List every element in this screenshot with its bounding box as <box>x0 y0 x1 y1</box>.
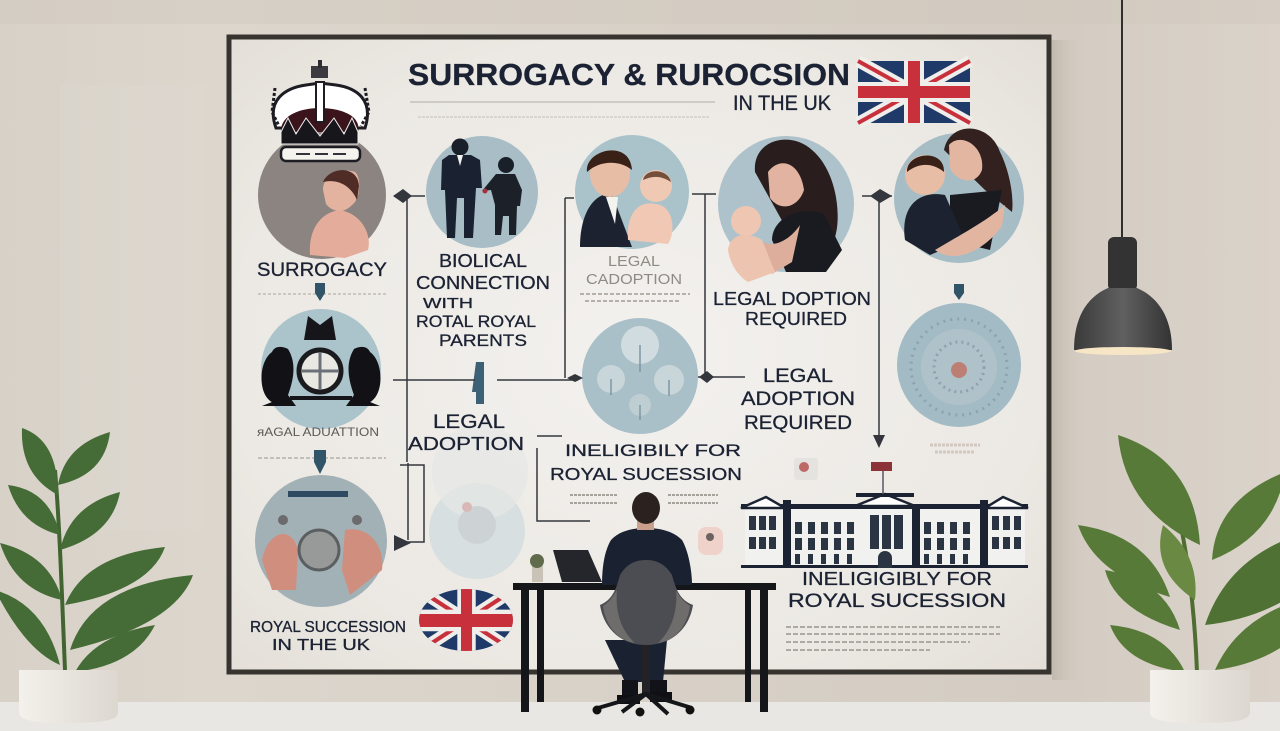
label: biological connection: PARENTS <box>439 331 527 350</box>
icon: location pin right <box>954 284 964 300</box>
icon: royal coat of arms <box>261 309 381 429</box>
label: biological connection <box>416 251 550 350</box>
label: legal adoption: LEGAL <box>433 412 505 433</box>
lamp <box>1074 0 1172 355</box>
label: ineligibly for royal succession right <box>786 569 1006 650</box>
label: legal adoption required: LEGAL <box>763 366 833 387</box>
label: legal adoption <box>408 362 524 454</box>
title: SURROGACY & RUROCSION <box>408 57 850 92</box>
label: biological connection: BIOLICAL <box>439 251 527 271</box>
label: ineligibly for royal succession right: INELIGIGIBLY FOR <box>802 569 992 589</box>
panel: emblem right <box>897 303 1021 427</box>
label: biological connection: ROTAL ROYAL <box>416 312 536 331</box>
panel: woman with child <box>894 128 1024 263</box>
framed board <box>229 37 1049 672</box>
label: legal dopotion required: LEGAL DOPTION <box>713 289 871 309</box>
plant right <box>1078 435 1280 723</box>
icon: UK flag top <box>858 61 970 123</box>
small decorative notes <box>570 445 980 555</box>
label: biological connection: WITH <box>423 295 473 312</box>
label: royal succession in the uk <box>250 619 406 654</box>
label: royal succession in the uk: IN THE UK <box>272 637 371 654</box>
label: legal dopotion required <box>713 289 871 329</box>
icon: location pin left top <box>315 283 325 301</box>
palace <box>741 462 1028 568</box>
label: ineligibly for royal succession center: INELIGIBILY FOR <box>565 441 741 460</box>
title: IN THE UK <box>733 92 831 115</box>
label: legal adoption faded left <box>257 425 386 458</box>
panel: seal <box>255 475 387 607</box>
label: legal adoption required <box>741 366 855 434</box>
label: ineligibly for royal succession center: ROYAL SUCESSION <box>550 464 742 484</box>
label: legal adoption faded left: ᴙAGAL ADUATTION <box>257 425 379 439</box>
icon: UK flag circle <box>419 589 513 651</box>
label: legal adoption required: ADOPTION <box>741 389 855 410</box>
panel: boy with baby <box>575 135 689 249</box>
label: legal adoption faded <box>580 253 690 301</box>
label: legal adoption: ADOPTION <box>408 434 524 454</box>
person at desk <box>513 492 776 716</box>
label: legal adoption faded: LEGAL <box>608 253 660 270</box>
floor <box>0 702 1280 731</box>
panel: faded emblem <box>429 424 528 579</box>
panel: mother holding baby <box>718 136 854 282</box>
label: ineligibly for royal succession center <box>550 441 742 484</box>
label: biological connection: CONNECTION <box>416 273 550 293</box>
panel: tree diagram center <box>582 318 698 434</box>
plant left <box>0 428 193 723</box>
icon: crown <box>272 60 369 161</box>
label: legal adoption required: REQUIRED <box>744 413 852 434</box>
label: legal dopotion required: REQUIRED <box>745 309 847 329</box>
title <box>408 57 850 117</box>
panel: parent and child silhouettes <box>426 136 538 248</box>
label: legal adoption faded: CADOPTION <box>586 271 682 288</box>
arrow heads <box>393 189 892 551</box>
icon: location pin left <box>314 450 326 474</box>
label: ineligibly for royal succession right: ROYAL SUCESSION <box>788 591 1006 612</box>
label: royal succession in the uk: ROYAL SUCCESSION <box>250 619 406 636</box>
label: surrogacy: SURROGACY <box>257 260 387 281</box>
panel: surrogacy baby <box>258 131 386 259</box>
arrows and connectors <box>393 194 892 542</box>
